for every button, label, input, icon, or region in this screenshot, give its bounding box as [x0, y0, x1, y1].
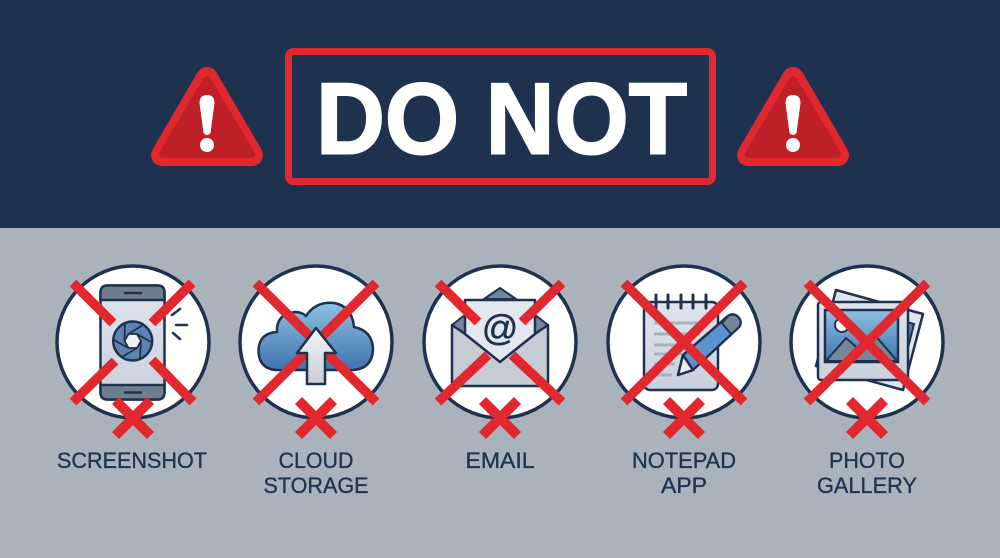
icon: small red cross: [298, 400, 334, 436]
label: notepad app: NOTEPAD: [632, 448, 736, 473]
item: photo gallery: GALLERY: [817, 473, 917, 498]
icon: notepad and pencil: [608, 266, 760, 418]
item: photo gallery: [791, 266, 943, 498]
icon: cloud with upload arrow: [240, 266, 392, 418]
item: cloud storage: STORAGE: [264, 473, 368, 498]
icon: open envelope with at sign: [424, 266, 576, 418]
item: notepad app: [608, 266, 760, 498]
label: cloud storage: CLOUD: [278, 448, 354, 473]
icon: open envelope with at sign: @: [482, 307, 518, 348]
background: lower grey panel: [0, 228, 1000, 558]
icon: small red cross: [666, 400, 702, 436]
icon: phone with camera shutter: [57, 266, 209, 418]
item: screenshot: [57, 266, 209, 473]
item: email: [424, 266, 576, 473]
icon: small red cross: [116, 400, 150, 436]
icon: small red cross: [482, 400, 518, 436]
item: notepad app: APP: [661, 473, 707, 498]
label: photo gallery: PHOTO: [829, 448, 905, 473]
label: screenshot: SCREENSHOT: [57, 448, 207, 473]
label: email: EMAIL: [466, 448, 534, 473]
icon: small red cross: [850, 400, 884, 436]
title box: DO NOT: DO NOT: [316, 64, 687, 176]
header band: [0, 0, 1000, 228]
item: cloud storage: [240, 266, 392, 498]
icon: stacked photos: [791, 266, 943, 418]
icon: right warning triangle: [748, 78, 838, 155]
icon: left warning triangle: [162, 78, 252, 155]
